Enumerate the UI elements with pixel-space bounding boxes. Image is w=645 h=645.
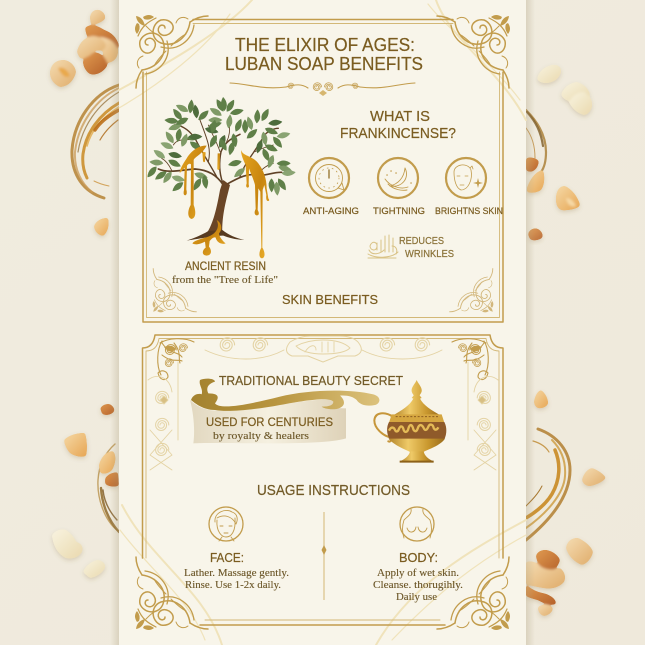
brush stroke: upper left [72,85,119,198]
caption: ancient resin [172,261,278,286]
icon: calligraphy ornament [368,235,398,258]
block: body instructions: Cleanse. thorugihly. [373,580,463,591]
title: LUBAN SOAP BENEFITS [225,53,423,74]
corner ornament: frame one top right [437,15,510,88]
ribbon banner [190,379,379,443]
panel: tradition and usage frame [135,335,510,630]
label: brightens skin: BRIGHTNS SKIN [435,206,503,217]
paper panel [119,0,526,645]
illustration: frankincense tree [145,97,296,258]
paper panel shadows [110,0,535,645]
caption: ancient resin: from the "Tree of Life" [172,274,278,286]
tree roots [187,230,244,241]
corner ornament: frame two bottom right [437,557,510,630]
icon: brightening face [446,158,486,198]
corner ornament: frame one top left [135,15,208,88]
panel: what is frankincense frame [135,15,510,322]
block: face instructions: Lather. Massage gently. [184,568,289,579]
label: reduces wrinkles: REDUCES [399,236,444,247]
frankincense: pale pebbles top right [537,65,592,115]
block: body instructions: BODY: [399,551,438,565]
frankincense: left lower pebbles [52,404,119,578]
frankincense cluster: top left [77,10,119,74]
ribbon text [206,415,333,442]
heading: skin benefits: SKIN BENEFITS [282,292,378,307]
brush stroke: upper right [526,110,546,172]
tree trunk [207,180,230,233]
icon: face [209,507,243,541]
corner ornament: frame one bottom left [153,269,196,312]
title: THE ELIXIR OF AGES: [235,34,415,55]
frankincense: left pebble [50,60,76,87]
heading: traditional beauty secret: TRADITIONAL BEAUTY SECRET [219,374,403,388]
frankincense: amber pebble right [556,186,580,210]
label: reduces wrinkles [399,236,454,260]
block: face instructions: FACE: [210,551,244,565]
illustration: golden lamp [374,380,446,463]
filigree: top right corner [452,339,488,380]
heading: usage instructions: USAGE INSTRUCTIONS [257,483,410,499]
brush stroke: lower left [98,444,119,532]
filigree: top left corner [158,339,194,380]
block: body instructions: Apply of wet skin. [377,568,459,579]
tree leaves [145,97,296,196]
corner ornament: frame two bottom left [135,557,208,630]
corner ornament: frame one bottom right [450,269,493,312]
divider [322,512,326,600]
frankincense: pebbles on upper right stroke [526,157,544,193]
block: face instructions [184,551,289,591]
icon: tightening moon [378,158,418,198]
title [225,34,423,74]
block: face instructions: Rinse. Use 1-2x daily. [185,580,281,591]
label: anti-aging: ANTI-AGING [303,206,359,217]
icon: anti-aging clock [309,158,349,198]
ribbon text: USED FOR CENTURIES [206,415,333,429]
filigree: left side [148,362,178,470]
heading: what is frankincense: FRANKINCENSE? [340,125,456,142]
filigree: right side [468,362,498,470]
label: tightening: TIGHTNING [373,206,425,217]
heading: what is frankincense: WHAT IS [370,108,430,125]
block: body instructions [373,551,463,603]
block: body instructions: Daily use [396,592,437,603]
icon: body [400,507,434,541]
faint gold swirls on paper [119,0,526,645]
resin drips [180,146,269,258]
heading: what is frankincense [340,108,456,142]
brush stroke: lower right [526,429,570,540]
caption: ancient resin: ANCIENT RESIN [185,261,266,273]
label: reduces wrinkles: WRINKLES [405,249,454,260]
title flourish [230,83,415,96]
tree branches [158,115,282,185]
ribbon text: by royalty & healers [213,430,309,442]
frankincense: right lower pebbles [526,390,606,616]
frankincense: small pebble right [528,229,542,240]
frankincense: small left pebble [94,218,108,236]
filigree: top band [205,336,442,362]
